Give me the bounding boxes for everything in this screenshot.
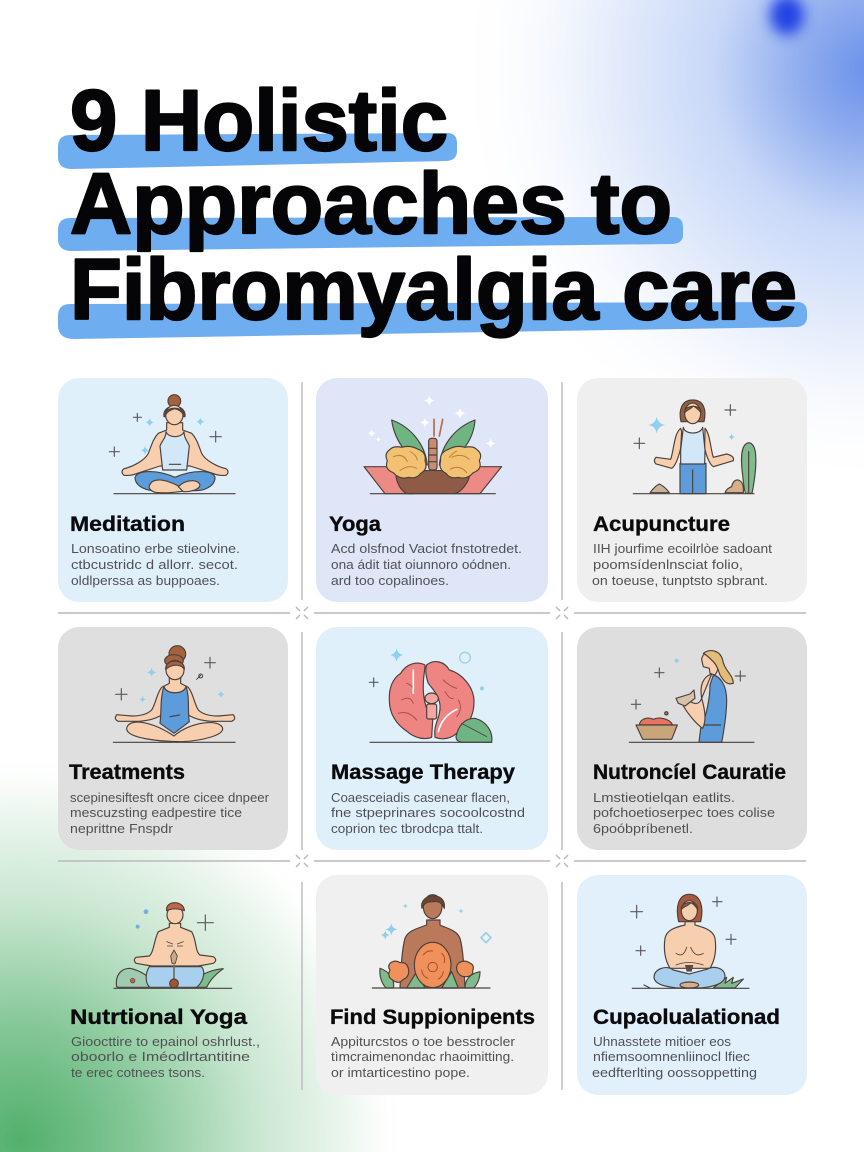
icon: woman meditating: [109, 395, 235, 494]
highlight bar line 3: [58, 302, 807, 339]
description: [71, 1034, 260, 1080]
panel: Treatments: [58, 627, 288, 850]
description: IIH jourfime ecoilrlòe sadoant: [593, 541, 772, 556]
card background: [316, 627, 548, 850]
description: [593, 790, 775, 836]
description: mescuzsting eadpestire tice: [70, 805, 242, 820]
description: Lmstieotielqan eatlits.: [593, 790, 735, 805]
description: oldlperssa as buppoaes.: [71, 573, 220, 588]
heading: Massage Therapy: [331, 761, 515, 784]
panel: Massage Therapy: [316, 627, 548, 850]
description: fne stpeprinares socoolcostnd: [331, 805, 525, 820]
card background: [316, 378, 548, 602]
panel: Nutritional Yoga: [70, 903, 260, 1080]
description: [331, 1034, 516, 1080]
description: [331, 541, 522, 588]
heading: Treatments: [69, 761, 185, 784]
panel: Acupuncture: [577, 378, 807, 602]
description: tìmcraimenondac rhaoimitting.: [331, 1049, 514, 1064]
icon: seated person with grass: [631, 894, 749, 988]
title: [58, 73, 807, 339]
description: ctbcustridc d allorr. secot.: [71, 557, 238, 572]
description: Acd olsfnod Vaciot fnstotredet.: [331, 541, 522, 556]
description: [70, 790, 270, 836]
heading: Yoga: [329, 513, 381, 536]
highlight bar line 1: [58, 133, 457, 169]
panel: Cupaolualationad: [577, 875, 807, 1095]
icon: man meditating with leaves: [114, 903, 232, 988]
heading: Meditation: [70, 513, 185, 536]
description: [592, 1034, 757, 1080]
card background: [577, 875, 807, 1095]
card background: [58, 378, 288, 602]
panel: Meditation: [58, 378, 288, 602]
dividers: [58, 382, 806, 1090]
description: oboorlo e Iméodlrtantitine: [71, 1049, 250, 1064]
card background: [316, 875, 548, 1095]
description: te erec cotnees tsons.: [71, 1065, 205, 1080]
heading: Acupuncture: [593, 513, 730, 536]
icon: woman in lotus pose: [113, 646, 235, 742]
description: neprittne Fnspdr: [70, 821, 174, 836]
description: 6poóbpríbenetl.: [593, 821, 693, 836]
icon: brain with leaf: [369, 648, 492, 742]
heading: Find Suppionipents: [330, 1006, 535, 1029]
heading: Nutroncíel Cauratie: [593, 761, 786, 784]
description: Appiturcstos o toe besstrocler: [331, 1034, 516, 1049]
highlight bar line 2: [58, 217, 683, 251]
description: Gioocttire to epainol oshrlust.,: [71, 1034, 260, 1049]
description: Uhnasstete mitioer eos: [593, 1034, 732, 1049]
title line 2: Approaches to: [70, 156, 672, 252]
description: eedfterlting oossoppetting: [592, 1065, 757, 1080]
panel: Yoga: [316, 378, 548, 602]
card background: [577, 378, 807, 602]
description: [592, 541, 772, 588]
icon: food bowl with leaves: [364, 395, 502, 494]
description: [331, 790, 525, 836]
card background: [577, 627, 807, 850]
description: nfiemsoomnenliinocl lfiec: [593, 1049, 751, 1064]
description: Lonsoatino erbe stieolvine.: [71, 541, 240, 556]
description: [71, 541, 240, 588]
heading: Nutrtional Yoga: [70, 1006, 247, 1029]
description: ona ádit tiat oiunnoro oódnen.: [331, 557, 511, 572]
heading: Cupaolualationad: [593, 1006, 780, 1029]
panel: Find Supplements: [316, 875, 548, 1095]
card background: [58, 627, 288, 850]
description: pofchoetioserpec toes colise: [593, 805, 775, 820]
icon: standing woman with plant: [633, 400, 756, 494]
description: ard too copalinoes.: [331, 573, 449, 588]
description: coprion tec tbrodcpa ttalt.: [331, 821, 483, 836]
description: or imtarticestino pope.: [331, 1065, 470, 1080]
icon: man with orange flowers: [372, 895, 491, 988]
description: on toeuse, tunptsto spbrant.: [592, 573, 768, 588]
description: Coaesceiadis casenear flacen,: [331, 790, 510, 805]
title line 1: 9 Holistic: [70, 73, 448, 169]
description: scepinesiftesft oncre cicee dnpeer: [70, 790, 270, 805]
title line 3: Fibromyalgia care: [70, 242, 797, 338]
panel: Nutroncíel Cauratie: [577, 627, 807, 850]
icon: woman preparing food: [629, 651, 754, 742]
description: poomsídenlnsciat folio,: [593, 557, 743, 572]
